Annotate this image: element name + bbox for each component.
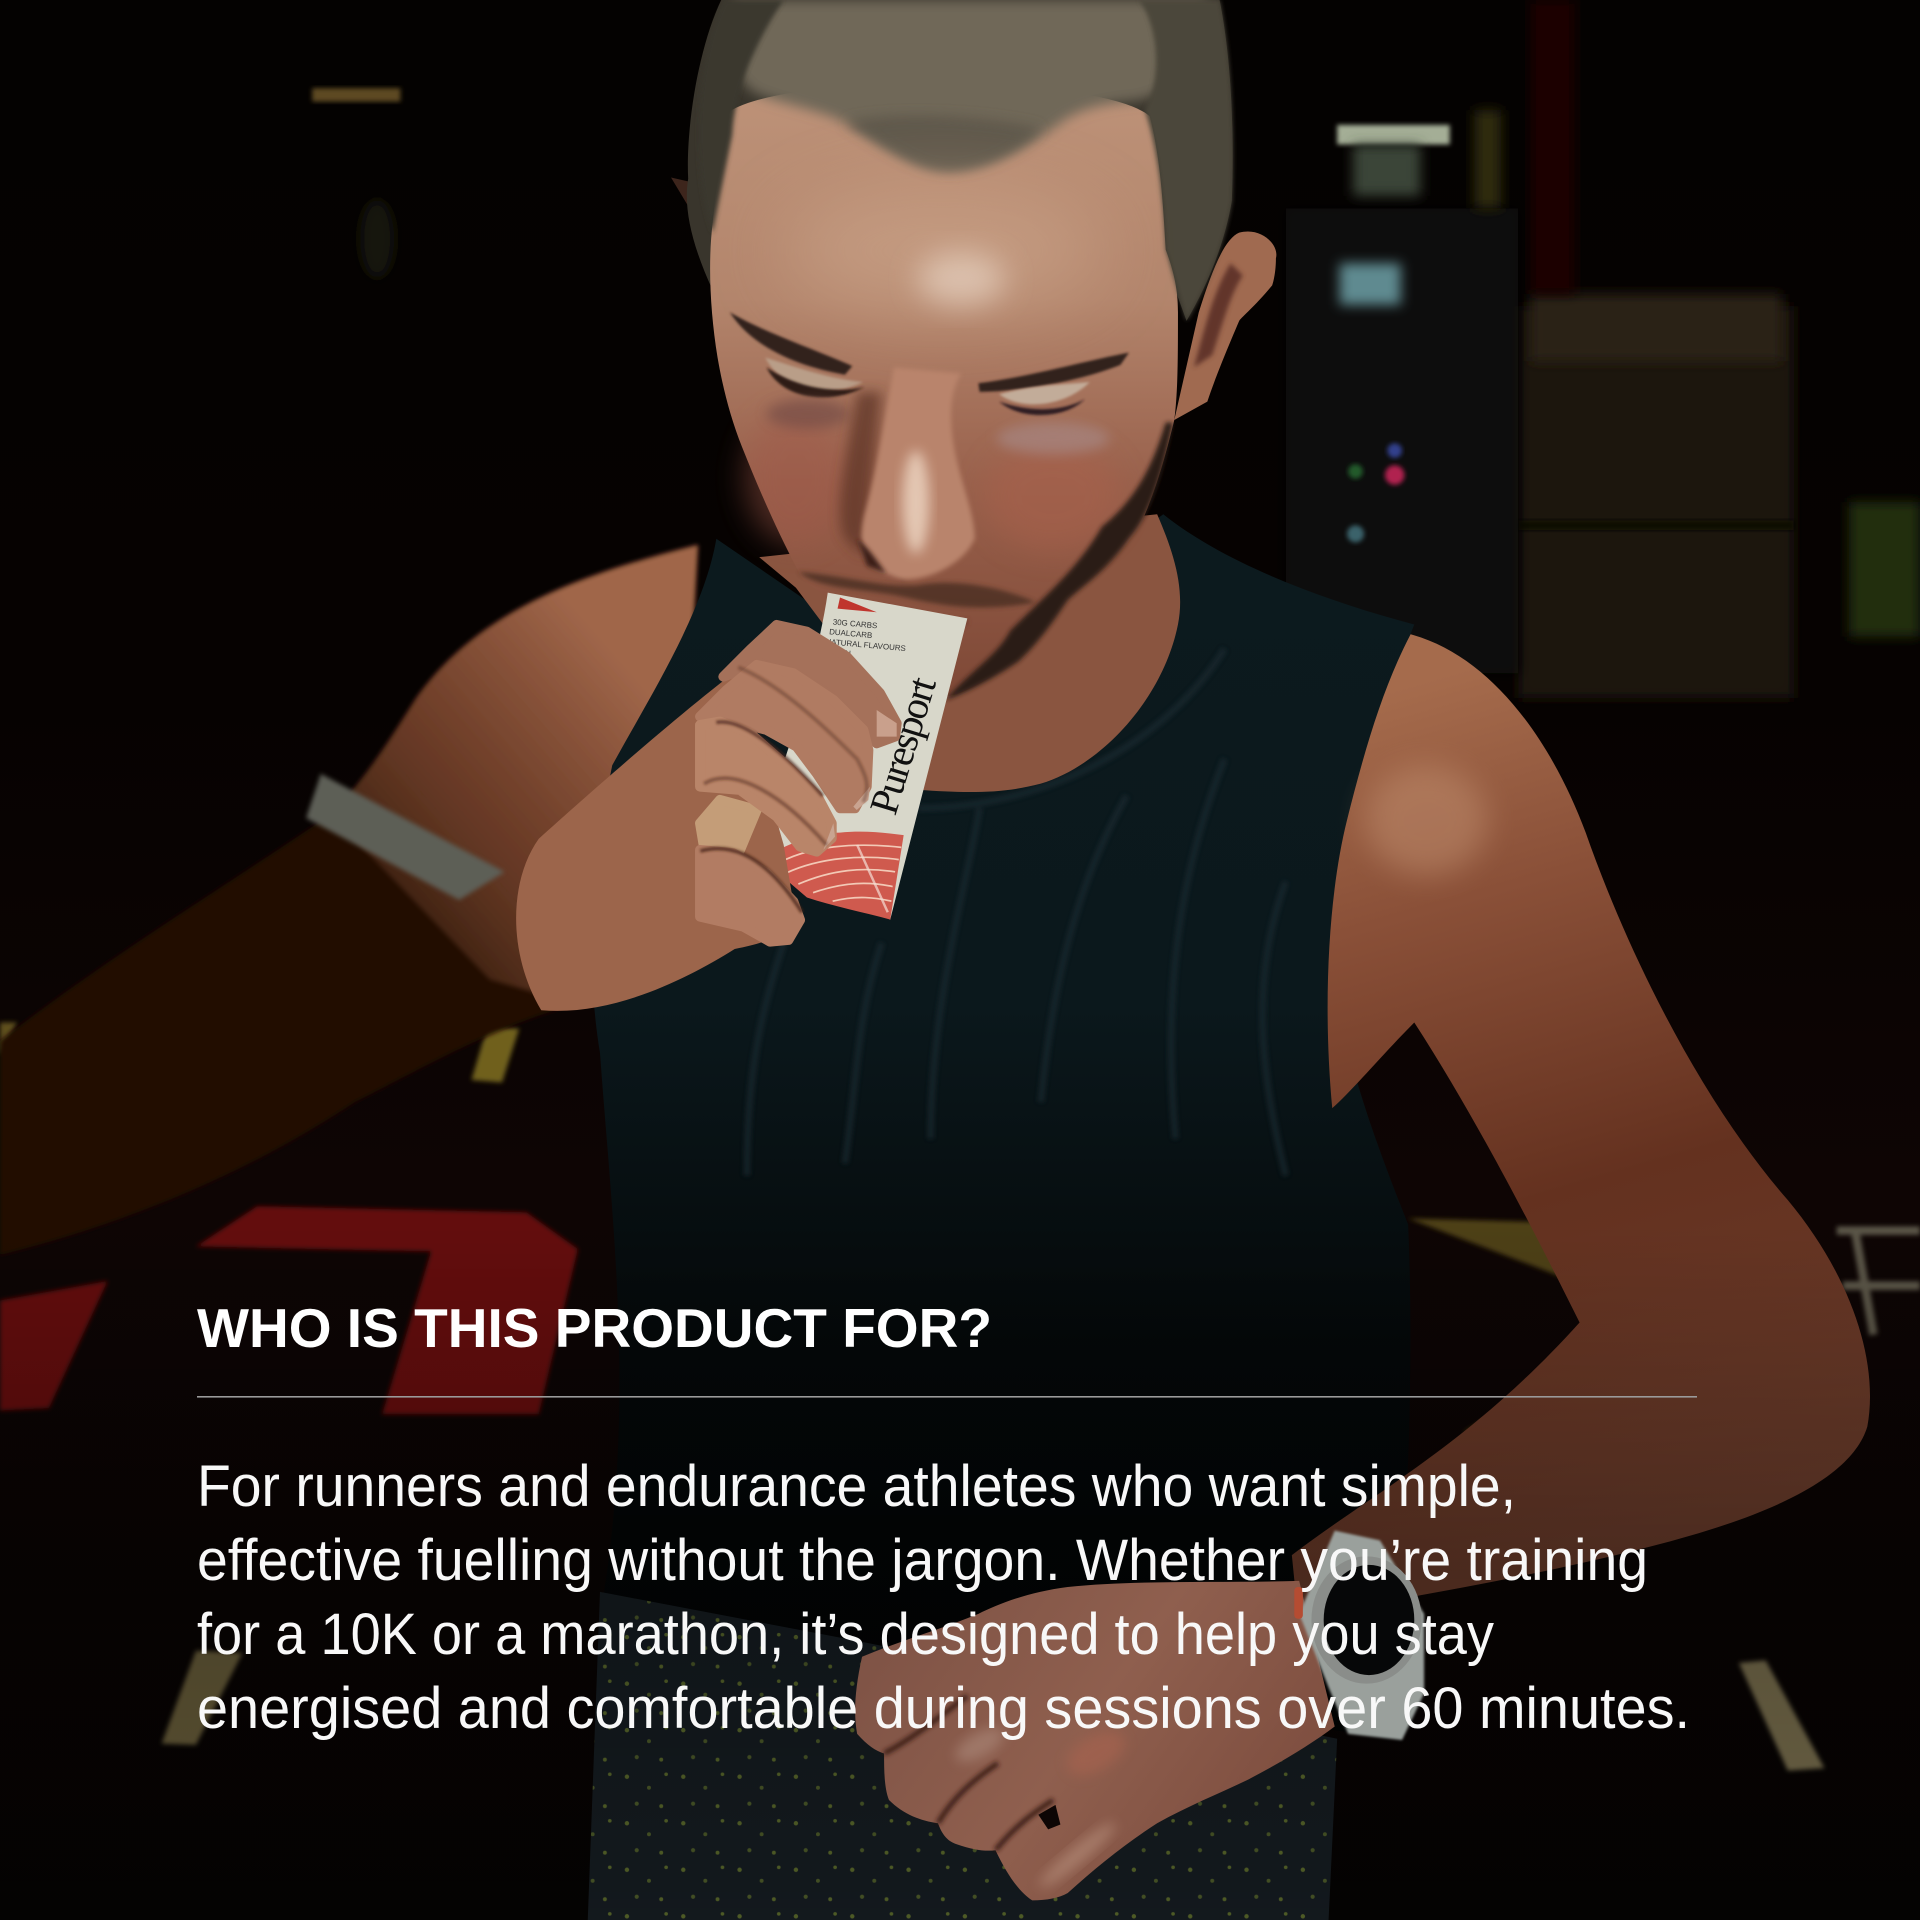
arm band: [306, 774, 504, 900]
right arm, viewer's right: [1292, 634, 1870, 1616]
body text: for a 10K or a marathon, it’s designed to help you stay: [197, 1602, 1494, 1667]
gel details: 30G CARBS: [832, 618, 878, 630]
forehead shine: [784, 190, 1102, 312]
brows, eyes and nose: [730, 312, 1129, 585]
knuckles and finger gaps: [884, 1696, 1132, 1893]
gel details: [823, 618, 906, 658]
crown of short hair: [729, 0, 1208, 170]
gel details: DUALCARB: [829, 627, 873, 640]
body text: For runners and endurance athletes who want simple,: [197, 1454, 1516, 1519]
gel packet: [749, 593, 967, 920]
hand holding gel: [516, 625, 897, 1011]
beard and mouth: [798, 422, 1173, 700]
hair: [687, 0, 1233, 321]
background gym equipment: [312, 0, 1920, 698]
gel brand: Puresport: [861, 672, 945, 819]
body text: [197, 1454, 1690, 1741]
heading: WHO IS THIS PRODUCT FOR?: [197, 1297, 992, 1359]
text panel: [197, 1297, 1697, 1741]
bottom photo shade: [0, 1224, 1920, 1920]
body text: effective fuelling without the jargon. Whether you’re training: [197, 1528, 1648, 1593]
gel details: NATURAL FLAVOURS: [825, 637, 906, 653]
fingers: [700, 625, 897, 942]
sports watch: [1294, 1531, 1424, 1740]
neck and chest: [759, 514, 1180, 792]
finger shadows: [700, 667, 867, 912]
tank top: [592, 514, 1414, 1739]
gel details: VEGAN: [823, 647, 851, 658]
shoulder highlight: [1365, 765, 1488, 876]
tank top folds: [747, 649, 1286, 1176]
raised arm, viewer's left: [0, 545, 698, 1255]
body text: energised and comfortable during sessions over 60 minutes.: [197, 1676, 1690, 1741]
divider: [197, 1396, 1697, 1398]
shorts: [588, 1592, 1337, 1920]
cheek blush: [744, 410, 847, 545]
lower hand and wrist: [855, 1581, 1335, 1900]
ear: [1174, 231, 1276, 420]
floor markings: [0, 1022, 1920, 1771]
face: [710, 84, 1178, 697]
